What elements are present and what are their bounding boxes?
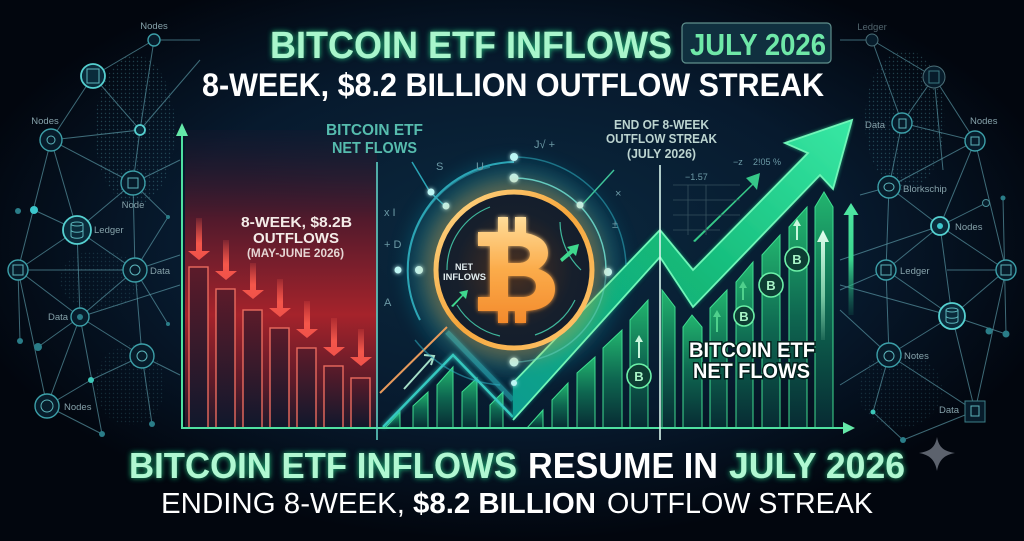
text: end of outflow streak: OUTFLOW STREAK bbox=[606, 131, 718, 146]
node: blorkschip bbox=[878, 176, 947, 198]
node: document bbox=[8, 260, 28, 280]
glow behind coin bbox=[406, 162, 622, 378]
footer headline bbox=[129, 445, 905, 486]
node: data square bbox=[939, 401, 985, 422]
chart: green inflow bars bbox=[385, 192, 833, 428]
text: outflows label: OUTFLOWS bbox=[253, 230, 339, 247]
node: notes bbox=[877, 343, 929, 367]
text: net inflows bbox=[443, 262, 486, 282]
orange trend line bbox=[380, 327, 447, 393]
footer subheading bbox=[161, 488, 874, 520]
text: net inflows: INFLOWS bbox=[443, 272, 486, 282]
node: data square: Data bbox=[939, 405, 960, 416]
decor: sketched symbols: A bbox=[384, 297, 392, 309]
icon: small bitcoin coins: B bbox=[766, 278, 776, 293]
teal beam into valley bbox=[447, 332, 513, 400]
node: file bbox=[81, 64, 105, 88]
node: small hub bbox=[135, 125, 145, 135]
text: end of outflow streak: END OF 8-WEEK bbox=[614, 117, 710, 132]
panel: left blockchain network bbox=[8, 21, 200, 437]
icon: small green trend arrow bbox=[693, 173, 760, 242]
text: outflows label: 8-WEEK, $8.2B bbox=[241, 214, 352, 231]
node: ledger top: Ledger bbox=[857, 22, 887, 33]
node: data bbox=[865, 113, 912, 133]
title: BITCOIN ETF INFLOWS bbox=[270, 25, 672, 67]
icon: small bitcoin coins: B bbox=[792, 252, 802, 267]
node: data: Data bbox=[865, 120, 886, 131]
node: data right bbox=[123, 258, 171, 282]
text: bitcoin etf net flows top: BITCOIN ETF bbox=[326, 122, 423, 139]
node: node: Node bbox=[122, 200, 144, 211]
node: ledger middle bbox=[876, 260, 930, 280]
node: database bbox=[939, 303, 965, 329]
node: data lower bbox=[48, 308, 89, 326]
node: nodes upper bbox=[965, 116, 998, 151]
node: nodes left bbox=[31, 116, 62, 151]
footer headline: BITCOIN ETF INFLOWS bbox=[129, 445, 517, 486]
node: ledger bbox=[63, 216, 124, 244]
node: data lower: Data bbox=[48, 312, 69, 323]
decor: sketched symbols: 2!05 % bbox=[753, 157, 781, 167]
badge: july 2026: JULY 2026 bbox=[690, 27, 826, 62]
footer headline: RESUME IN bbox=[528, 445, 718, 486]
node: ledger middle: Ledger bbox=[900, 266, 930, 277]
icon: bitcoin symbol bbox=[478, 217, 555, 323]
text: net inflows: NET bbox=[455, 262, 474, 272]
node: nodes left: Nodes bbox=[31, 116, 59, 127]
chart: red outflow bars bbox=[189, 267, 370, 428]
decor: sketched symbols: + D bbox=[384, 239, 401, 251]
subtitle: 8-WEEK, $8.2 BILLION OUTFLOW STREAK bbox=[202, 67, 824, 103]
icon: net inflow arrows bbox=[451, 244, 579, 307]
node: data right: Data bbox=[150, 266, 171, 277]
node: gear bbox=[130, 344, 154, 368]
node: nodes top: Nodes bbox=[140, 21, 168, 32]
icon: small bitcoin coins: B bbox=[634, 369, 644, 384]
text: end of outflow streak bbox=[606, 117, 718, 161]
decor: small grid table bbox=[673, 185, 740, 235]
decor: sketched symbols: × bbox=[615, 188, 621, 200]
node: nodes middle: Nodes bbox=[955, 222, 983, 233]
icon: right green up arrow bbox=[844, 203, 858, 315]
icon: small bitcoin coins bbox=[627, 247, 809, 388]
decor: sketched symbols bbox=[384, 139, 781, 309]
footer subheading: ENDING 8-WEEK, bbox=[161, 488, 405, 520]
node: ledger: Ledger bbox=[94, 225, 124, 236]
decor: sketched symbols: x I bbox=[384, 207, 396, 219]
icon: red down arrows bbox=[188, 218, 372, 366]
text: outflows label bbox=[241, 214, 352, 260]
text: end of outflow streak: (JULY 2026) bbox=[627, 146, 696, 161]
footer subheading: $8.2 BILLION bbox=[413, 488, 596, 520]
node: nodes middle bbox=[931, 217, 983, 235]
text: bitcoin etf net flows top bbox=[326, 122, 423, 157]
decor: sketched symbols: ± bbox=[612, 219, 618, 231]
text: bitcoin etf net flows bars bbox=[689, 339, 815, 383]
node: nodes bottom bbox=[35, 394, 92, 418]
node: nodes bottom: Nodes bbox=[64, 402, 92, 413]
text: bitcoin etf net flows bars: NET FLOWS bbox=[693, 360, 810, 383]
node: node bbox=[121, 171, 145, 211]
decor: tech rings around coin bbox=[408, 157, 626, 385]
decor: sketched symbols: J√ + bbox=[534, 139, 555, 151]
icon: trend mini arrows bbox=[404, 355, 434, 389]
axis: vertical and horizontal bbox=[176, 123, 855, 434]
node: small dots bbox=[15, 206, 170, 437]
footer subheading: OUTFLOW STREAK bbox=[607, 488, 874, 520]
panel: right blockchain network bbox=[840, 22, 1016, 443]
icon: pale up arrows in bars bbox=[635, 219, 829, 358]
decor: sketched symbols: −z bbox=[733, 157, 743, 167]
node: notes: Notes bbox=[904, 351, 929, 362]
text: bitcoin etf net flows top: NET FLOWS bbox=[332, 140, 417, 157]
icon: small bitcoin coins: B bbox=[739, 309, 749, 324]
node: ledger top bbox=[857, 22, 887, 46]
node: chip bbox=[996, 260, 1016, 280]
icon: bitcoin coin bbox=[424, 180, 604, 360]
arrow: large green rising trend bbox=[513, 120, 852, 420]
text: bitcoin etf net flows bars: BITCOIN ETF bbox=[689, 339, 815, 362]
decor: dotted globes bbox=[60, 50, 945, 428]
panel: red outflows background bbox=[185, 130, 377, 428]
footer headline: JULY 2026 bbox=[729, 445, 905, 486]
node: blorkschip: Blorkschip bbox=[903, 184, 947, 195]
node: nodes top bbox=[140, 21, 168, 46]
node: document top bbox=[923, 66, 945, 88]
text: outflows label: (MAY-JUNE 2026) bbox=[247, 246, 344, 260]
decor: sketched symbols: S bbox=[436, 161, 443, 173]
decor: sketched symbols: U bbox=[476, 161, 484, 173]
node: nodes upper: Nodes bbox=[970, 116, 998, 127]
node: small dots bbox=[870, 196, 1010, 443]
divider lines bbox=[377, 162, 660, 440]
icon: sparkle watermark bbox=[919, 437, 955, 471]
decor: sketched symbols: −1.57 bbox=[685, 172, 708, 182]
decor: glowing tech dots bbox=[394, 153, 612, 386]
teal mountain line bbox=[383, 355, 513, 427]
